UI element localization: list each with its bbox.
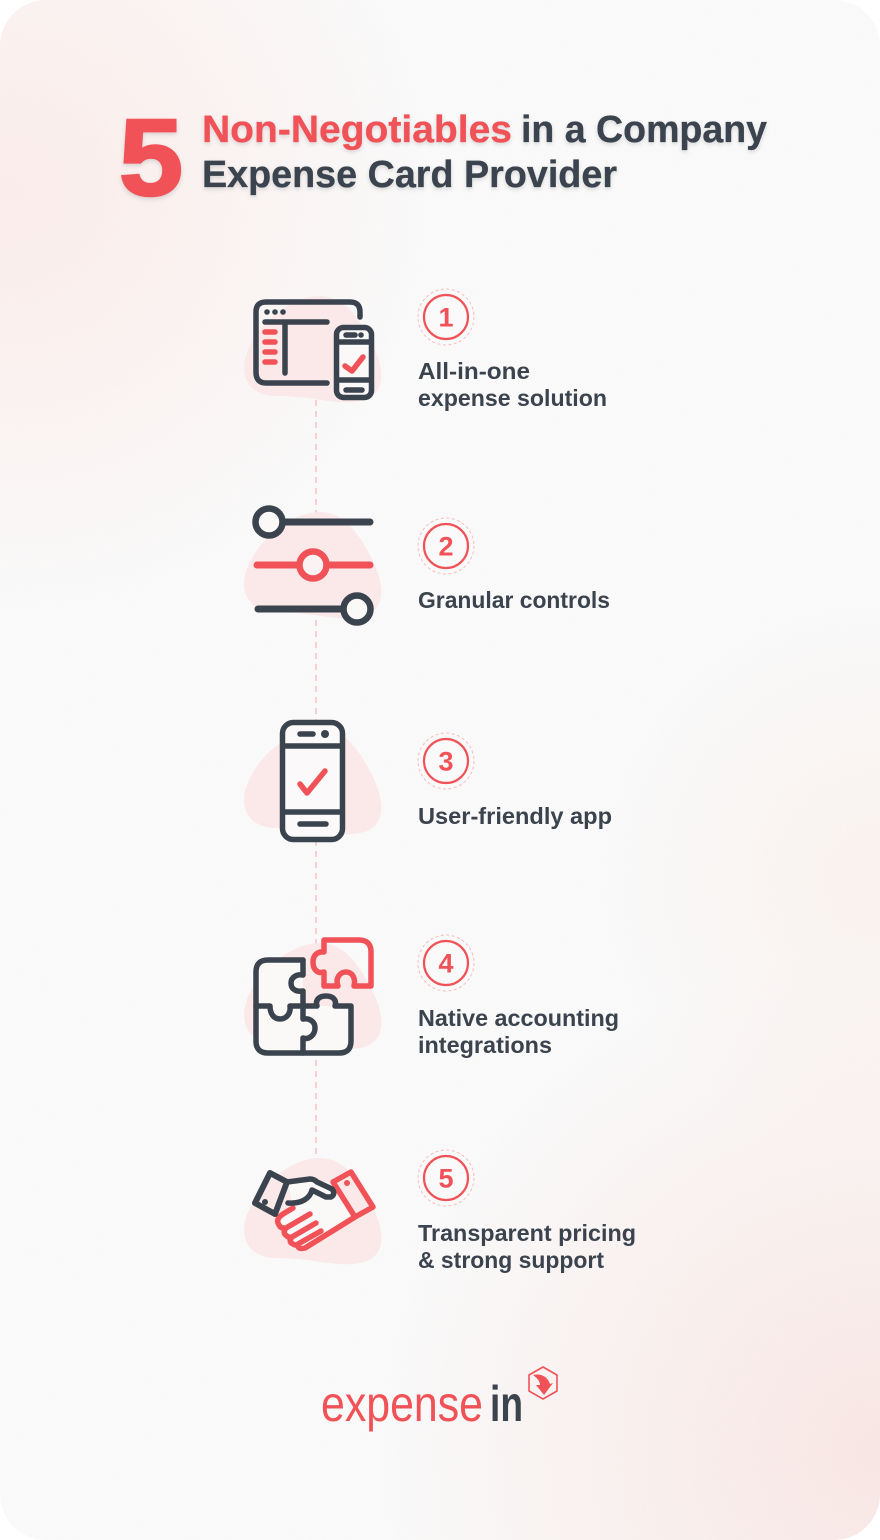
- title line one: in a Company: [521, 109, 767, 151]
- step 3: [244, 722, 612, 840]
- label 5: & strong support: [418, 1247, 604, 1273]
- big numeral 5: 5: [119, 97, 183, 219]
- number badge 4: 4: [438, 948, 454, 978]
- dashed connector line: [315, 400, 317, 1162]
- step 1: [244, 289, 607, 411]
- icon: browser window and phone: [244, 296, 381, 402]
- label 5: Transparent pricing: [418, 1220, 636, 1246]
- logo hexagon mark: [529, 1367, 557, 1399]
- title: [119, 97, 767, 219]
- logo: expensein: [321, 1367, 557, 1432]
- label 1: All-in-one: [418, 358, 530, 384]
- number badge 1: [418, 289, 474, 345]
- label 3: User-friendly app: [418, 803, 612, 829]
- number badge 2: [418, 518, 474, 574]
- icon: puzzle pieces: [244, 940, 381, 1053]
- number badge 5: 5: [438, 1164, 454, 1194]
- number badge 2: 2: [438, 532, 454, 562]
- title line one: Non-Negotiables: [202, 109, 512, 151]
- title line two: Expense Card Provider: [202, 154, 617, 196]
- step 5: [244, 1150, 636, 1273]
- label 4: Native accounting: [418, 1005, 619, 1031]
- label 1: expense solution: [418, 385, 607, 411]
- icon: sliders: [244, 508, 381, 622]
- icon: smartphone with check: [244, 722, 381, 840]
- logo wordmark: in: [490, 1376, 523, 1432]
- label 4: integrations: [418, 1032, 552, 1058]
- label 2: Granular controls: [418, 587, 610, 613]
- number badge 1: 1: [438, 302, 454, 332]
- number badge 3: 3: [438, 746, 454, 776]
- number badge 4: [418, 935, 474, 991]
- step 2: [244, 508, 610, 622]
- number badge 5: [418, 1150, 474, 1206]
- icon: handshake: [244, 1158, 381, 1264]
- logo wordmark: expense: [321, 1376, 483, 1432]
- number badge 3: [418, 733, 474, 789]
- step 4: [244, 935, 619, 1058]
